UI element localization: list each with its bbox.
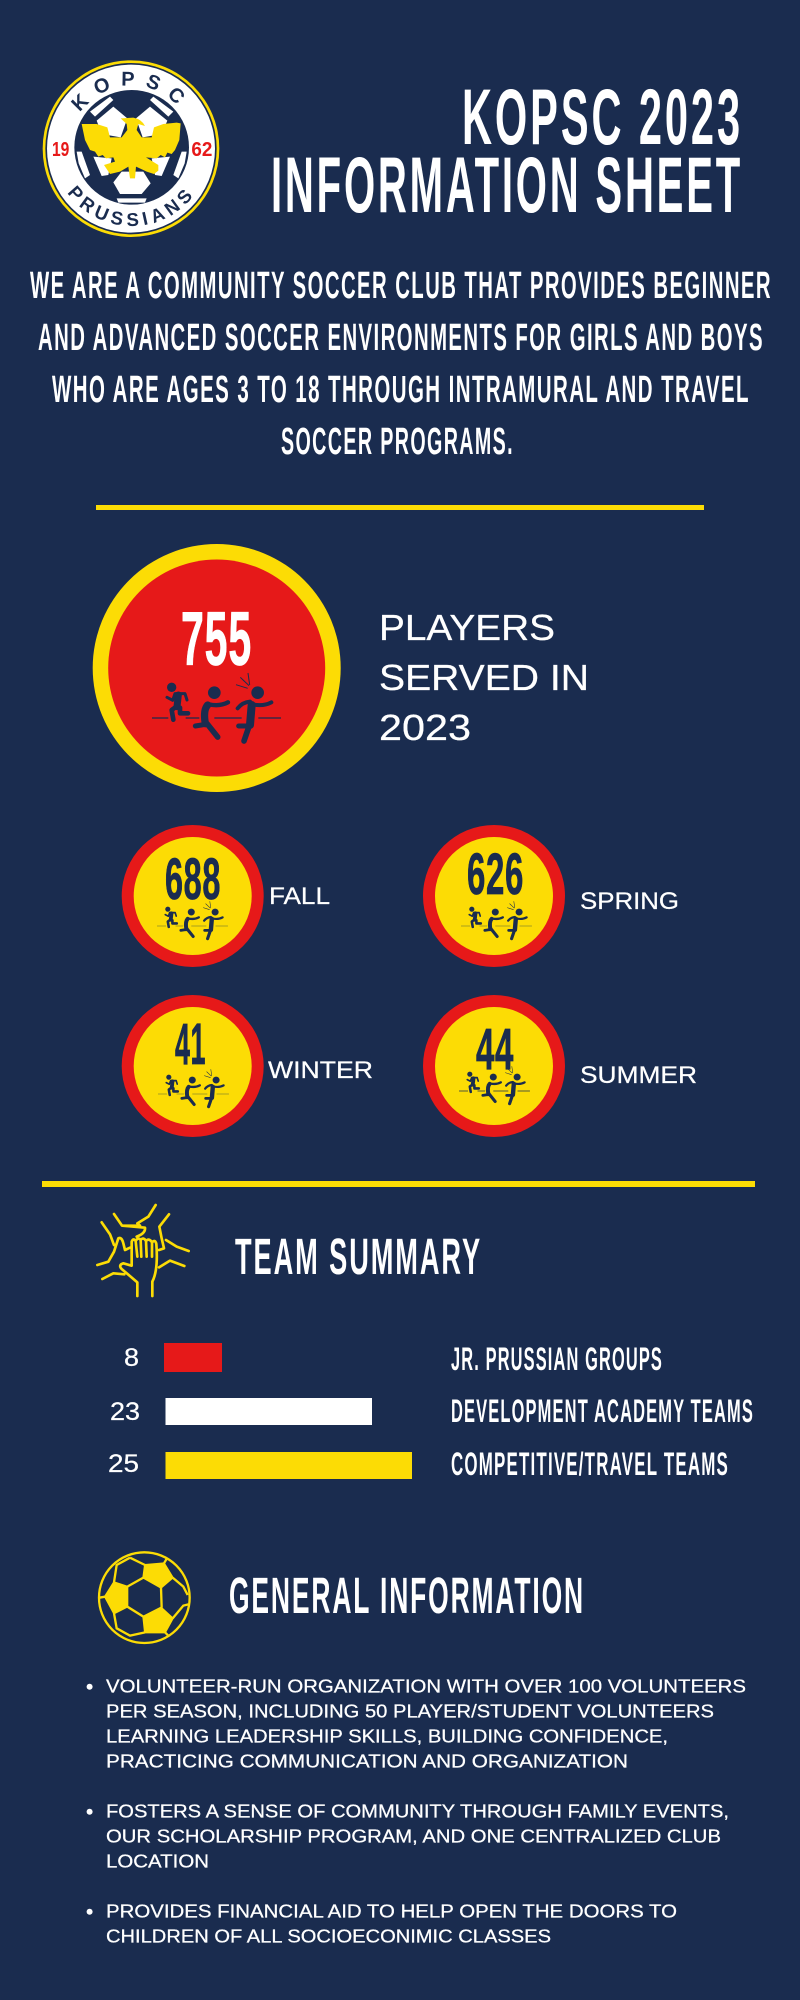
icon: running players: [158, 1069, 229, 1107]
row: jr prussian groups: [124, 1341, 663, 1377]
bullet list: general information: [87, 1676, 746, 1947]
bullet 2: [87, 1801, 729, 1872]
bullet 1: PRACTICING COMMUNICATION AND ORGANIZATION: [106, 1751, 628, 1772]
panel: winter badge: [122, 995, 264, 1137]
players served label: 2023: [379, 707, 471, 748]
bullet 3: [87, 1901, 677, 1947]
bullet 2: FOSTERS A SENSE OF COMMUNITY THROUGH FAMILY EVENTS,: [106, 1801, 729, 1822]
intro paragraph: [30, 265, 772, 463]
intro paragraph: SOCCER PROGRAMS.: [281, 421, 514, 463]
bullet 2: LOCATION: [106, 1851, 209, 1872]
bullet 1: [87, 1676, 746, 1772]
bullet 2: OUR SCHOLARSHIP PROGRAM, AND ONE CENTRALIZED CLUB: [106, 1826, 721, 1847]
panel: total players badge: [93, 544, 341, 792]
crest founded year: 19: [52, 138, 69, 161]
crest text: PRUSSIANS: PRUSSIANS: [68, 185, 192, 226]
label: summer: SUMMER: [580, 1062, 697, 1089]
eagle: [82, 118, 181, 178]
panel: winter badge: 41: [175, 1012, 206, 1077]
bar chart: team counts: [108, 1341, 754, 1482]
label: spring: SPRING: [580, 888, 679, 915]
label: fall: FALL: [269, 883, 330, 910]
heading: team summary: TEAM SUMMARY: [235, 1228, 482, 1285]
icon: team hands: [97, 1205, 189, 1296]
crest founded year: [52, 138, 212, 161]
logo: KOPSC Prussians crest: [42, 60, 220, 237]
panel: fall badge: [122, 825, 264, 967]
players served label: [379, 607, 589, 748]
number: 755: 755: [181, 597, 252, 682]
bullet 1: LEARNING LEADERSHIP SKILLS, BUILDING CONFIDENCE,: [106, 1726, 668, 1747]
bullet 3: CHILDREN OF ALL SOCIOECONIMIC CLASSES: [106, 1926, 551, 1947]
crest founded year: 62: [191, 138, 212, 161]
row: competitive travel teams: [108, 1446, 729, 1482]
number: 688: 688: [165, 847, 221, 912]
row: development academy teams: [110, 1393, 754, 1429]
icon: running players: [152, 673, 281, 741]
players served label: PLAYERS: [379, 607, 555, 648]
row: development academy teams: 23: [110, 1398, 140, 1426]
panel: spring badge: [423, 825, 565, 967]
bullet 1: PER SEASON, INCLUDING 50 PLAYER/STUDENT VOLUNTEERS: [106, 1701, 714, 1722]
row: competitive travel teams: 25: [108, 1450, 139, 1478]
label: winter: WINTER: [268, 1057, 373, 1084]
row: jr prussian groups: 8: [124, 1344, 139, 1372]
icon: running players: [459, 1066, 530, 1104]
players served label: SERVED IN: [379, 657, 589, 698]
icon: soccer ball: [99, 1552, 190, 1643]
title: [271, 72, 743, 229]
bullet 3: PROVIDES FINANCIAL AID TO HELP OPEN THE DOORS TO: [106, 1901, 677, 1922]
number: 626: 626: [467, 842, 524, 907]
icon: running players: [157, 901, 228, 939]
bullet 1: VOLUNTEER-RUN ORGANIZATION WITH OVER 100 VOLUNTEERS: [106, 1676, 746, 1697]
panel: summer badge: [423, 995, 565, 1137]
number: 44: 44: [476, 1017, 514, 1082]
icon: running players: [461, 901, 532, 939]
crest text: KOPSC: KOPSC: [70, 72, 184, 112]
